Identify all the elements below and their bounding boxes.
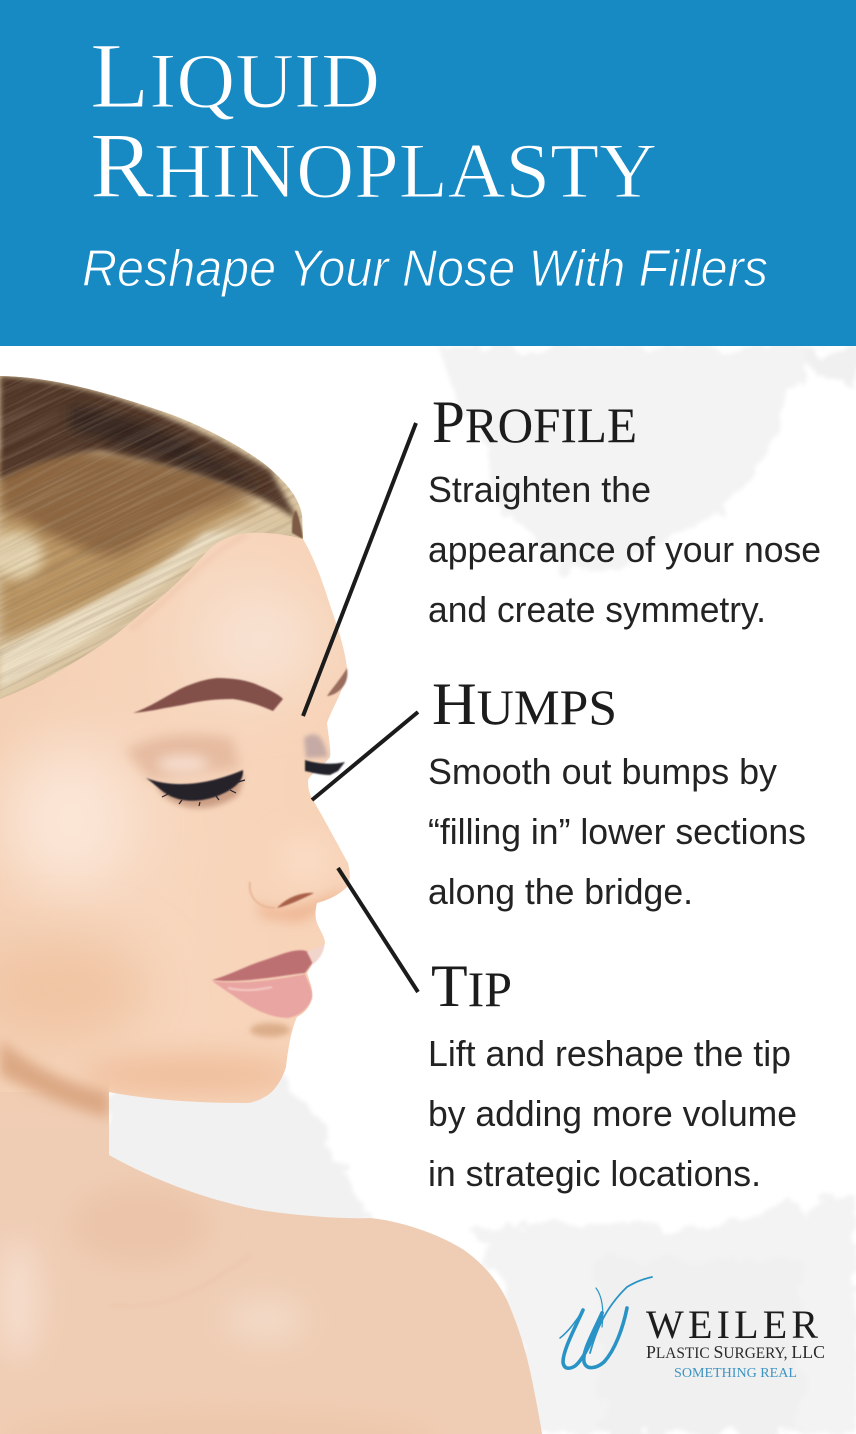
far eye lashes (305, 760, 345, 775)
nostril (277, 893, 314, 908)
neck and shoulder (0, 1092, 542, 1434)
far eyelid (304, 734, 328, 758)
text: tip description: Lift and reshape the tip (428, 1033, 791, 1074)
text: humps description: Smooth out bumps by (428, 751, 777, 792)
eye shadow (125, 734, 245, 808)
logo descriptor: PLASTIC SURGERY, LLC (646, 1342, 825, 1362)
face (0, 376, 350, 1103)
face shading (0, 535, 347, 1097)
heading: tip: TIP (431, 953, 512, 1019)
heading: profile: PROFILE (432, 389, 637, 455)
header banner (0, 0, 856, 346)
watercolor background texture (100, 346, 856, 1434)
title: LIQUID (90, 25, 380, 128)
text: humps description (428, 751, 806, 912)
text: humps description: along the bridge. (428, 871, 693, 912)
lips (212, 945, 324, 1018)
pointer line: humps (312, 712, 418, 800)
nose wing contour (250, 882, 275, 908)
text: tip description: in strategic locations. (428, 1153, 761, 1194)
hair (0, 376, 303, 699)
logo tagline: SOMETHING REAL (674, 1366, 797, 1381)
text: tip description: by adding more volume (428, 1093, 797, 1134)
portrait: woman in profile (0, 376, 542, 1434)
title: RHINOPLASTY (90, 115, 657, 218)
icon: W swoosh monogram (560, 1277, 652, 1368)
text: profile description (428, 469, 821, 630)
section: profile (428, 389, 821, 630)
subtitle: Reshape Your Nose With Fillers (82, 240, 768, 298)
logo name: WEILER (646, 1302, 818, 1347)
text: tip description (428, 1033, 797, 1194)
section: tip (428, 953, 797, 1194)
pointer line: tip (338, 868, 418, 992)
text: humps description: “filling in” lower sections (428, 811, 806, 852)
near eye lashes (146, 770, 245, 806)
title (90, 25, 657, 218)
text: profile description: and create symmetry. (428, 589, 766, 630)
text: profile description: appearance of your nose (428, 529, 821, 570)
logo: Weiler Plastic Surgery (560, 1277, 825, 1381)
section: humps (428, 671, 806, 912)
far eyebrow (327, 668, 347, 696)
near eyebrow (133, 678, 283, 713)
jaw shadow (0, 1040, 109, 1118)
pointer line: profile (303, 423, 416, 716)
text: profile description: Straighten the (428, 469, 651, 510)
heading: humps: HUMPS (432, 671, 617, 737)
